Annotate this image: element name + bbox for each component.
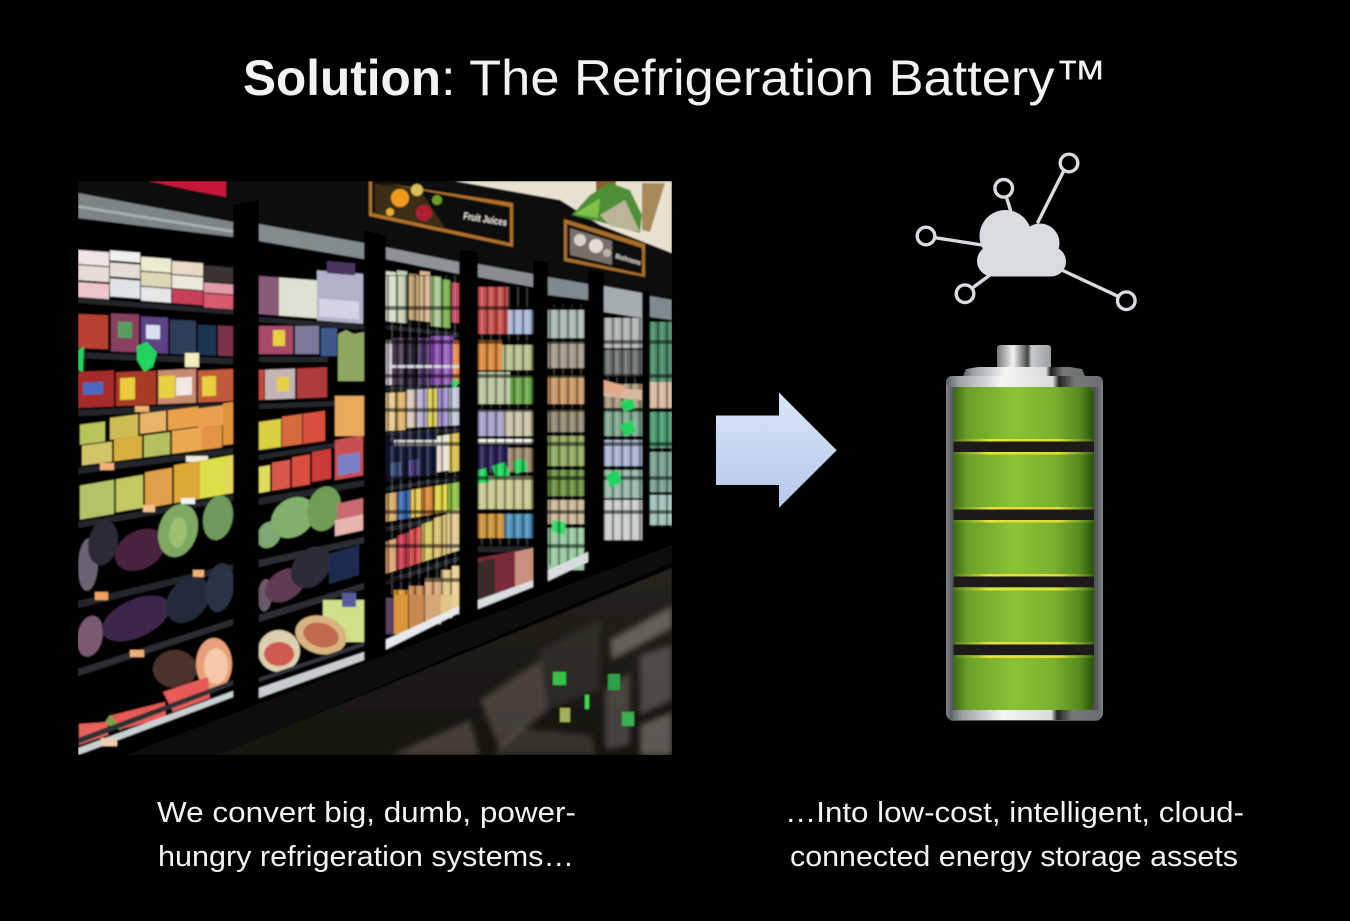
orange juice bottles	[335, 396, 364, 436]
icon: battery	[946, 345, 1103, 721]
title: Solution	[243, 50, 441, 106]
arrow	[716, 392, 837, 508]
bottle shading	[385, 275, 459, 595]
freezer door 5	[548, 277, 588, 581]
bottle shading	[604, 318, 642, 540]
freezer door 1	[77, 192, 234, 755]
freezer door 6	[602, 284, 644, 542]
row 1: juice bottles	[385, 267, 459, 329]
store wall	[78, 181, 672, 755]
door frames and kick plate	[125, 200, 672, 755]
row 4: cups	[259, 411, 325, 450]
freezer door 2	[257, 224, 364, 698]
row 6: bagged produce	[78, 489, 233, 593]
freezer door 4	[478, 264, 533, 609]
row 3: berries	[259, 367, 327, 400]
battery shoulder	[963, 367, 1085, 376]
row 2: clamshells	[78, 312, 233, 356]
row 6: jars	[385, 482, 459, 522]
row 4: fruit cups	[80, 402, 233, 466]
floor with reflections	[218, 568, 672, 755]
plants above the signs	[572, 181, 665, 233]
bottle shading	[650, 322, 672, 527]
caption: right	[785, 797, 1244, 873]
row 8: melons and salad bowls	[78, 638, 233, 755]
row 2: dark and purple bottles	[385, 336, 459, 385]
battery cells	[954, 387, 1094, 710]
battery terminal	[997, 345, 1051, 369]
caption: left: We convert big, dumb, power-	[157, 797, 576, 829]
bottle shading	[548, 305, 584, 565]
row 5: dark bottles	[385, 427, 459, 482]
green drink bottles	[338, 330, 364, 381]
battery casing	[946, 376, 1103, 721]
row 5: sliced fruit	[80, 455, 233, 520]
caption: left: hungry refrigeration systems…	[158, 841, 574, 873]
row 6: grapes	[258, 485, 364, 550]
sign: mushrooms	[564, 219, 645, 277]
row 1: fruit tubs	[78, 248, 233, 309]
charge level bands	[954, 439, 1094, 658]
photo: refrigerated supermarket cases	[77, 181, 672, 755]
row 8: salad bowls and jugs	[258, 593, 364, 698]
row 1: tubs and bottles	[259, 256, 363, 324]
bottle shading	[478, 287, 533, 547]
caption: left	[157, 797, 576, 873]
row 4: juice bottles	[385, 387, 459, 431]
row 8: juice jugs	[385, 566, 459, 650]
caption: right: …Into low-cost, intelligent, cloud-	[785, 797, 1244, 829]
row 7: dark bags	[258, 544, 360, 613]
row 2: clamshells	[259, 326, 337, 356]
row 5: cups and sauce	[259, 435, 363, 493]
icon: cloud network	[917, 154, 1135, 310]
row 3: berries	[78, 365, 233, 408]
freezer door 3	[385, 247, 459, 650]
row 7: dark bags	[77, 559, 234, 660]
freezer door 7	[650, 296, 672, 543]
caption: right: connected energy storage assets	[790, 841, 1238, 873]
sign: fruit juices	[369, 181, 513, 247]
title: : The Refrigeration Battery™	[441, 50, 1107, 106]
sign: fruit juices: Fruit Juices	[463, 211, 508, 229]
sign: mushrooms: Mushrooms	[614, 253, 641, 267]
row 7: red jars	[385, 508, 459, 574]
